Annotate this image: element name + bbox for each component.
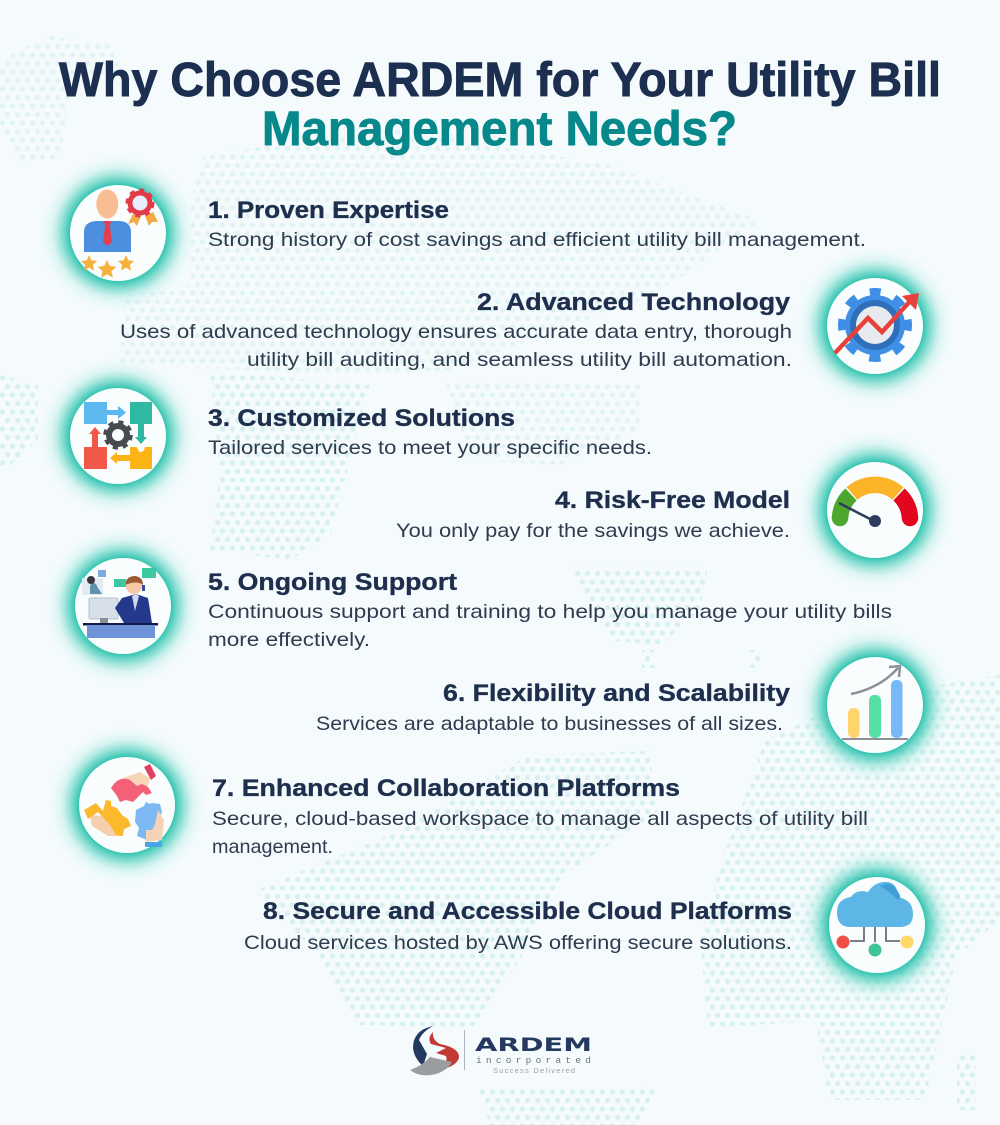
text: risk-free model [396,487,790,542]
text: enhanced collaboration platforms: Secure, cloud-based workspace to manage all aspects of utility bill [212,808,868,830]
logo: ARDEM incorporated [410,1026,592,1075]
icon: hands joining puzzle pieces [48,726,206,884]
text: ongoing support: Continuous support and training to help you manage your utility bills [208,601,892,623]
icon: gear with rising arrow [796,247,954,405]
text: ongoing support [208,569,892,651]
text: enhanced collaboration platforms [212,775,868,858]
text: flexibility and scalability: Services are adaptable to businesses of all sizes. [316,713,783,735]
title: Management Needs? [262,103,737,156]
text: proven expertise: 1. Proven Expertise [208,197,449,224]
icon: cloud network [798,846,956,1004]
text: customized solutions [208,405,652,459]
text: advanced technology: Uses of advanced technology ensures accurate data entry, thorough [120,321,792,343]
title [59,54,941,156]
text: enhanced collaboration platforms: management. [212,836,333,858]
text: advanced technology: utility bill auditing, and seamless utility bill automation. [247,349,792,371]
icon: customized puzzle with gear [39,357,197,515]
text: customized solutions: 3. Customized Solutions [208,405,515,432]
text: proven expertise [208,197,866,251]
logo: ARDEM incorporated: Success Delivered [493,1066,575,1075]
icon: support agent at desk [44,527,202,685]
logo: ARDEM incorporated: incorporated [476,1055,591,1066]
text: customized solutions: Tailored services to meet your specific needs. [208,437,652,459]
text: secure cloud platforms: 8. Secure and Accessible Cloud Platforms [263,898,792,925]
text: advanced technology [120,289,792,371]
text: ongoing support: more effectively. [208,629,370,651]
text: flexibility and scalability: 6. Flexibility and Scalability [443,680,791,707]
text: ongoing support: 5. Ongoing Support [208,569,457,596]
icon: expert with award [39,154,197,312]
icon: risk gauge [796,431,954,589]
text: risk-free model: 4. Risk-Free Model [555,487,790,514]
text: secure cloud platforms [244,898,792,954]
text: proven expertise: Strong history of cost savings and efficient utility bill management. [208,229,866,251]
text: secure cloud platforms: Cloud services hosted by AWS offering secure solutions. [244,932,792,954]
text: enhanced collaboration platforms: 7. Enhanced Collaboration Platforms [212,775,680,802]
logo: ARDEM incorporated: ARDEM [475,1034,592,1056]
text: advanced technology: 2. Advanced Technology [477,289,791,316]
title: Why Choose ARDEM for Your Utility Bill [59,54,941,107]
text: risk-free model: You only pay for the savings we achieve. [396,520,790,542]
icon: growing bar chart [796,626,954,784]
text: flexibility and scalability [316,680,791,735]
